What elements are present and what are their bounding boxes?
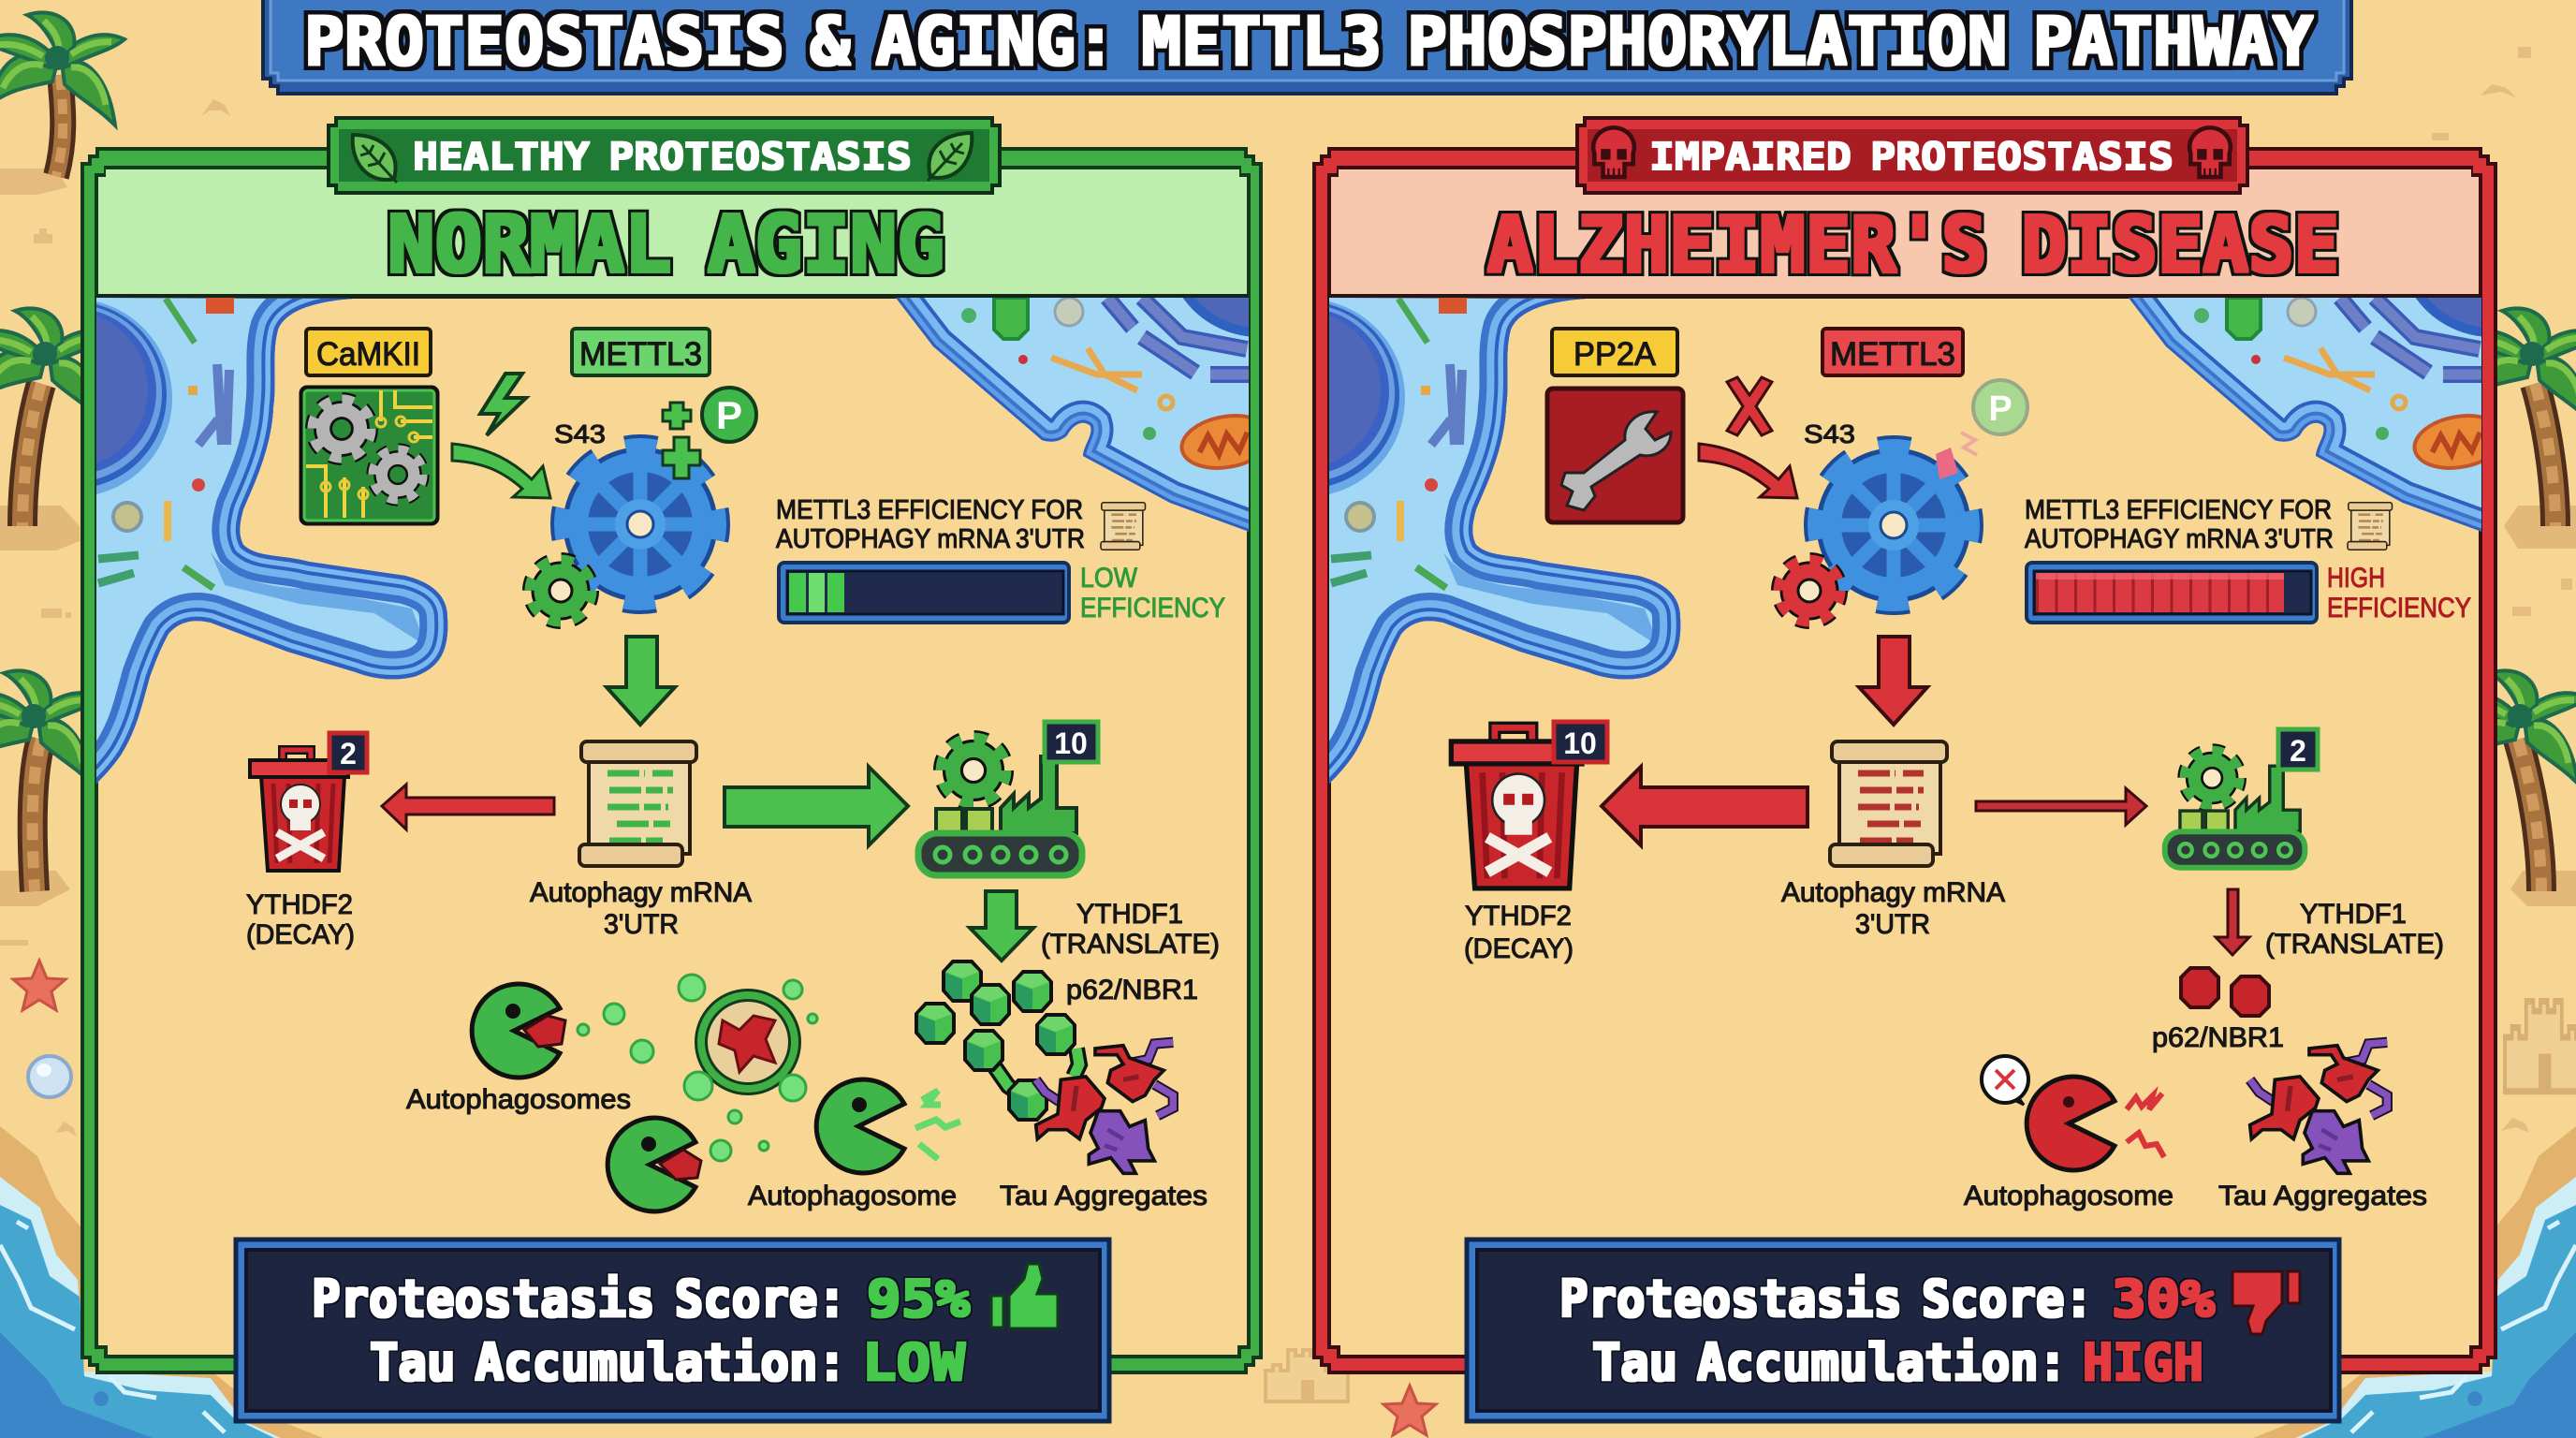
icon: small scroll right bbox=[2348, 503, 2393, 550]
label: YTHDF1 translate: (TRANSLATE) bbox=[1041, 929, 1220, 960]
badge: count 10 red: 10 bbox=[1563, 726, 1597, 760]
arrow: mRNA to decay thin bbox=[382, 785, 554, 829]
p62 NBR1 cubes red bbox=[2181, 968, 2269, 1016]
arrow: factory down thin bbox=[2216, 889, 2249, 955]
icon: autophagosome pacman top bbox=[472, 984, 565, 1078]
efficiency bar high bbox=[2027, 563, 2317, 623]
panel: normal aging bbox=[0, 149, 1353, 1372]
scoreboard: alzheimer's disease: 30% bbox=[2112, 1269, 2216, 1328]
label: autophagy mRNA right bbox=[1781, 877, 2005, 940]
icon: detached phosphate P bbox=[1961, 380, 2027, 455]
scoreboard: alzheimer's disease: HIGH bbox=[2083, 1333, 2203, 1392]
label: tau aggregates: Tau Aggregates bbox=[1000, 1181, 1208, 1211]
scoreboard: normal aging: Proteostasis Score: bbox=[312, 1269, 846, 1328]
badge: count 10: 10 bbox=[1054, 726, 1088, 760]
label: YTHDF1 translate right bbox=[2265, 899, 2444, 960]
label: autophagosomes: Autophagosomes bbox=[406, 1084, 631, 1115]
p62 NBR1 cubes and chains bbox=[916, 961, 1079, 1120]
label: autophagy mRNA bbox=[530, 877, 752, 940]
icon: detached phosphate P: P bbox=[1988, 389, 2012, 429]
sandcastle right bbox=[2505, 1002, 2576, 1092]
label: high efficiency: HIGH bbox=[2327, 563, 2385, 594]
scoreboard: normal aging: 95% bbox=[867, 1269, 971, 1328]
label: METTL3: METTL3 bbox=[579, 336, 702, 373]
starfish bottom bbox=[1383, 1386, 1436, 1435]
icon: METTL3 gear active bbox=[533, 437, 715, 619]
badge: count 2 bbox=[329, 733, 367, 772]
scoreboard: alzheimer's disease: Tau Accumulation: bbox=[1592, 1333, 2067, 1392]
heading: normal aging: NORMAL AGING bbox=[388, 198, 944, 290]
label: p62/NBR1 right: p62/NBR1 bbox=[2152, 1022, 2284, 1053]
label: YTHDF1 translate right: (TRANSLATE) bbox=[2265, 929, 2444, 960]
scoreboard: normal aging bbox=[236, 1240, 1109, 1421]
icon: small factory bbox=[2165, 753, 2305, 868]
efficiency bar low bbox=[779, 563, 1069, 623]
scoreboard: normal aging: Tau Accumulation: bbox=[370, 1333, 846, 1392]
arrow: mRNA to translate thick bbox=[724, 767, 908, 845]
label: autophagy mRNA right: Autophagy mRNA bbox=[1781, 877, 2005, 908]
icon: small scroll bbox=[1101, 503, 1146, 550]
label: YTHDF2 decay: (DECAY) bbox=[246, 919, 355, 950]
bubbles bbox=[578, 975, 817, 1161]
label: YTHDF1 translate: YTHDF1 bbox=[1076, 899, 1183, 930]
icon: thumbs down bbox=[2232, 1271, 2300, 1334]
starfish left bbox=[13, 961, 66, 1010]
text: efficiency title: AUTOPHAGY mRNA 3'UTR bbox=[776, 524, 1085, 554]
badge: count 2: 2 bbox=[340, 737, 357, 770]
label: S43: S43 bbox=[554, 419, 606, 448]
text: efficiency title bbox=[776, 495, 1085, 554]
label: low efficiency bbox=[1080, 563, 1225, 624]
title text: PROTEOSTASIS & AGING: METTL3 PHOSPHORYLATION PATHWAY bbox=[304, 3, 2313, 81]
icon: tau aggregates bbox=[1036, 1042, 1173, 1173]
icon: phosphate P bbox=[663, 388, 756, 442]
heading: alzheimer's disease: ALZHEIMER'S DISEASE bbox=[1487, 201, 2339, 290]
icon: mRNA scroll red bbox=[1830, 741, 1947, 866]
badge: healthy proteostasis bbox=[329, 118, 1000, 193]
label: METTL3 red: METTL3 bbox=[1830, 336, 1955, 373]
label: low efficiency: EFFICIENCY bbox=[1080, 593, 1225, 624]
icon: autophagosome pacman right bbox=[816, 1079, 960, 1173]
sparks: failed digestion bbox=[2127, 1093, 2164, 1157]
label: autophagosome right: Autophagosome bbox=[1964, 1181, 2174, 1211]
label: YTHDF1 translate bbox=[1041, 899, 1220, 960]
label: autophagy mRNA: 3'UTR bbox=[604, 909, 679, 940]
label: YTHDF2 decay right bbox=[1464, 901, 1573, 964]
badge: impaired proteostasis: IMPAIRED PROTEOSTASIS bbox=[1649, 136, 2174, 179]
arrow: mRNA to decay thick bbox=[1602, 767, 1808, 845]
beach and water, left corner bbox=[0, 1126, 323, 1438]
label: autophagy mRNA right: 3'UTR bbox=[1855, 909, 1930, 940]
label: YTHDF2 decay right: (DECAY) bbox=[1464, 933, 1573, 964]
icon: autophagosome pacman bottom bbox=[607, 1118, 701, 1211]
icon: PP2A wrench box bbox=[1547, 389, 1683, 522]
arrow: factory down bbox=[970, 891, 1033, 961]
label: S43 right: S43 bbox=[1804, 419, 1855, 448]
icon: mRNA scroll bbox=[579, 741, 696, 866]
badge: healthy proteostasis: HEALTHY PROTEOSTASIS bbox=[413, 136, 912, 179]
label: PP2A bbox=[1552, 329, 1677, 375]
label: PP2A: PP2A bbox=[1573, 336, 1657, 373]
label: METTL3 red bbox=[1822, 329, 1963, 375]
scoreboard: alzheimer's disease bbox=[1467, 1240, 2339, 1421]
label: YTHDF1 translate right: YTHDF1 bbox=[2300, 899, 2407, 930]
icon: CaMKII circuit chip bbox=[301, 388, 437, 523]
label: YTHDF2 decay right: YTHDF2 bbox=[1465, 901, 1572, 932]
seashell bbox=[28, 1056, 71, 1097]
label: autophagy mRNA: Autophagy mRNA bbox=[530, 877, 752, 908]
label: CaMKII: CaMKII bbox=[316, 336, 420, 373]
label: autophagosome: Autophagosome bbox=[748, 1181, 957, 1211]
label: CaMKII bbox=[306, 329, 431, 375]
badge: impaired proteostasis bbox=[1577, 118, 2247, 193]
icon: lightning bolt bbox=[480, 374, 526, 435]
badge: count 2 green bbox=[2278, 729, 2318, 770]
icon: inhibition X bbox=[1727, 377, 1772, 435]
label: high efficiency: EFFICIENCY bbox=[2327, 593, 2471, 624]
title banner bbox=[263, 0, 2351, 94]
panel: alzheimer's disease bbox=[1207, 149, 2576, 1372]
scoreboard: alzheimer's disease: Proteostasis Score: bbox=[1559, 1269, 2093, 1328]
scoreboard: normal aging: LOW bbox=[862, 1333, 966, 1392]
icon: translation factory bbox=[918, 741, 1082, 875]
decorative palm trees bbox=[0, 12, 2576, 906]
text: efficiency title right: METTL3 EFFICIENCY FOR bbox=[2025, 495, 2332, 525]
arrow: gear down to mRNA bbox=[607, 637, 675, 725]
badge: count 10 red bbox=[1554, 722, 1607, 762]
text: efficiency title right: AUTOPHAGY mRNA 3'UTR bbox=[2025, 524, 2334, 554]
icon: METTL3 gear impaired bbox=[1781, 448, 1969, 619]
arrow: PP2A to METTL3 bbox=[1699, 444, 1797, 498]
cell background bbox=[1207, 150, 2576, 786]
text: efficiency title: METTL3 EFFICIENCY FOR bbox=[776, 495, 1083, 525]
icon: central vesicle engulfing tau bbox=[701, 995, 795, 1089]
badge: count 10 bbox=[1045, 722, 1098, 762]
label: YTHDF2 decay: YTHDF2 bbox=[246, 889, 353, 920]
label: high efficiency bbox=[2327, 563, 2471, 624]
sand specks bbox=[0, 47, 2572, 1137]
icon: phosphate P: P bbox=[716, 393, 742, 437]
label: p62/NBR1: p62/NBR1 bbox=[1066, 975, 1198, 1005]
text: efficiency title right bbox=[2025, 495, 2334, 554]
icon: thumbs up bbox=[991, 1264, 1058, 1328]
arrow: CaMKII to METTL3 bbox=[452, 444, 550, 498]
arrow: mRNA to translate thin bbox=[1976, 788, 2146, 825]
icon: speech bubble with X bbox=[1982, 1056, 2028, 1105]
badge: count 2 green: 2 bbox=[2290, 734, 2306, 768]
arrow: gear down to mRNA right bbox=[1859, 637, 1927, 725]
sandcastle bottom centre bbox=[1266, 1350, 1348, 1401]
label: low efficiency: LOW bbox=[1080, 563, 1138, 594]
icon: YTHDF2 big trash can bbox=[1451, 727, 1582, 888]
label: tau aggregates right: Tau Aggregates bbox=[2218, 1181, 2427, 1211]
icon: failed autophagosome red bbox=[2027, 1077, 2115, 1170]
cell background bbox=[0, 150, 1353, 786]
icon: tau aggregates right bbox=[2250, 1042, 2387, 1173]
label: YTHDF2 decay bbox=[246, 889, 355, 950]
icon: YTHDF2 trash can bbox=[250, 750, 348, 871]
beach and water, right corner bbox=[2253, 1126, 2576, 1438]
